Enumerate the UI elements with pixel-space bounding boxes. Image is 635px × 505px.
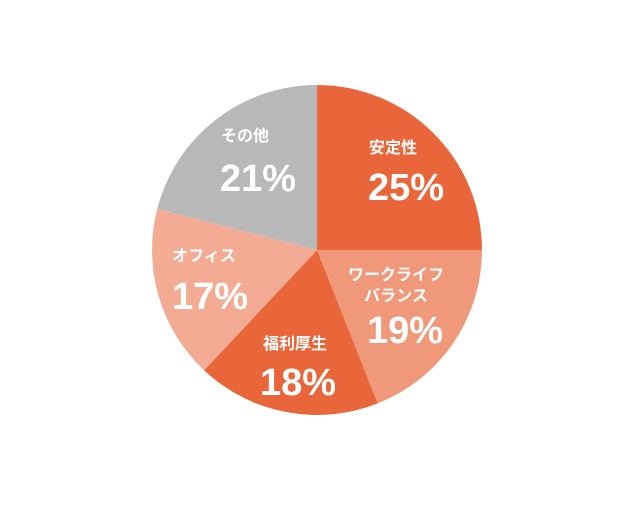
slice: 福利厚生 18%: 福利厚生 (263, 335, 327, 353)
slice: 福利厚生 18%: 18% (260, 362, 336, 404)
slice: ワークライフバランス 19% (317, 250, 482, 403)
slice: 福利厚生 18% (204, 250, 378, 415)
slice: オフィス 17% (152, 209, 317, 370)
slice: オフィス 17%: 17% (172, 276, 248, 318)
slice: 安定性 25% (317, 85, 482, 250)
slice: その他 21% (157, 85, 317, 250)
slice: ワークライフバランス 19%: バランス (364, 288, 428, 305)
slice: ワークライフバランス 19%: 19% (367, 310, 443, 352)
slice: その他 21%: その他 (221, 127, 269, 145)
slice: ワークライフバランス 19%: ワークライフ (348, 266, 444, 284)
slice: 安定性 25%: 25% (368, 167, 444, 209)
slice: その他 21%: 21% (220, 158, 296, 200)
slice: 安定性 25%: 安定性 (369, 138, 417, 157)
slice: オフィス 17%: オフィス (172, 247, 236, 265)
